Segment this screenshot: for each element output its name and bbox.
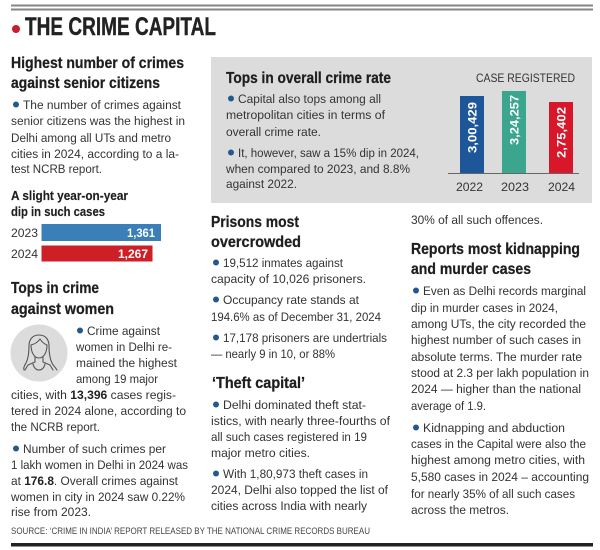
text block: murder: among UTs, the city recorded the (411, 317, 586, 331)
panel: kidnapping and murder (411, 241, 589, 517)
heading: prisons: Prisons most (211, 214, 299, 231)
text block: kidnapping (411, 421, 589, 517)
text block: prisons (211, 256, 387, 361)
text block: crime against women: mained the highest (76, 356, 178, 370)
heading: crime against women: Tops in crime (11, 280, 99, 297)
text block: rate per lakh women: at 176.8. Overall crimes against (11, 474, 179, 488)
bar chart: case registered (448, 71, 579, 194)
bar chart: senior citizen crimes: 1,361 (127, 226, 155, 240)
text block: senior citizens: senior citizens was the highest in (11, 114, 185, 128)
heading: senior citizens: against senior citizens (11, 75, 160, 92)
text block: theft capital: istics, with nearly three-fourths of (211, 414, 391, 428)
text block: kidnapping: 5,580 cases in 2024 – accounting (411, 470, 589, 484)
text block: senior citizens: The number of crimes against (23, 98, 182, 112)
text block: kidnapping: highest among metro cities, with (411, 453, 585, 467)
panel: senior citizens (11, 55, 185, 262)
bar chart: case registered: 2,75,402 (554, 107, 568, 158)
heading: crime against women: against women (11, 301, 114, 318)
text block: overall crime rate: Capital also tops among all (238, 92, 381, 106)
heading: theft capital: ‘Theft capital’ (212, 375, 305, 392)
subheading: year-on-year dip: A slight year-on-year (11, 189, 128, 203)
text block: theft capital: cities across India with nearly (211, 499, 368, 513)
text block: overall crime rate (225, 92, 419, 191)
text block: theft capital: 30% of all such offences. (411, 213, 543, 227)
title: THE CRIME CAPITAL (25, 13, 216, 41)
text block: prisons: Occupancy rate stands at (223, 293, 360, 307)
text block: senior citizens (11, 98, 185, 176)
text block: murder (411, 284, 589, 413)
text block: theft capital: Delhi dominated theft stat- (223, 398, 366, 412)
bar chart: case registered: 3,24,257 (508, 95, 522, 145)
text block: kidnapping: across the metros. (411, 503, 509, 517)
text block: murder: highest number of such cases in (411, 333, 581, 347)
text block: kidnapping: Kidnapping and abduction (423, 421, 565, 435)
text block: crime against women: the NCRB report. (11, 420, 100, 434)
bar chart: senior citizen crimes (11, 224, 161, 262)
text block: crime against women: women in Delhi re- (75, 340, 172, 354)
bar chart: case registered: CASE REGISTERED (476, 71, 575, 85)
text block: crime against women (11, 324, 186, 434)
heading: kidnapping and murder: and murder cases (411, 261, 531, 278)
text block: murder: 2024 — higher than the national (411, 382, 581, 396)
text block: crime against women: among 19 major (76, 372, 158, 386)
heading: kidnapping and murder: Reports most kidnapping (411, 241, 580, 258)
text block: overall crime rate: against 2022. (226, 177, 297, 191)
text block: senior citizens: Delhi among all UTs and metro (11, 131, 171, 145)
text block: crime against women: Crime against (87, 324, 161, 338)
text block: prisons: 19,512 inmates against (223, 256, 344, 270)
source note: SOURCE: ‘CRIME IN INDIA’ REPORT RELEASED BY THE NATIONAL CRIME RECORDS BUREAU (11, 526, 370, 537)
panel: overall crime rate (211, 57, 592, 203)
text block: crime against women: cities, with 13,396 cases regis- (11, 388, 176, 402)
text block: overall crime rate: It, however, saw a 15% dip in 2024, (238, 146, 419, 160)
panel: theft capital (211, 213, 543, 513)
heading: kidnapping and murder (411, 241, 580, 278)
text block: theft capital: With 1,80,973 theft cases in (223, 467, 368, 481)
text block: overall crime rate: overall crime rate. (226, 125, 321, 139)
subheading: year-on-year dip (11, 189, 128, 219)
text block: rate per lakh women: rise from 2023. (11, 505, 91, 519)
text block: murder: Even as Delhi records marginal (423, 284, 586, 298)
bar chart: senior citizen crimes: 2024 (11, 247, 38, 261)
subheading: year-on-year dip: dip in such cases (11, 205, 105, 219)
heading: prisons: overcrowded (211, 234, 301, 251)
text block: rate per lakh women: women in city in 2024 saw 0.22% (10, 490, 185, 504)
text block: kidnapping: cases in the Capital were also the (411, 437, 586, 451)
bar chart: case registered: 2024 (548, 180, 575, 194)
text block: murder: absolute terms. The murder rate (411, 350, 582, 364)
text block: senior citizens: cities in 2024, according to a la- (11, 147, 179, 161)
text block: theft capital (211, 213, 543, 513)
panel: prisons (211, 214, 387, 361)
bar chart: case registered: 2023 (501, 180, 529, 194)
text block: rate per lakh women (10, 442, 188, 519)
text block: kidnapping: for nearly 35% of all such cases (411, 487, 575, 501)
icon: woman portrait (10, 324, 68, 382)
text block: overall crime rate: when compared to 2023, and 8.8% (225, 162, 410, 176)
bar chart: senior citizen crimes: 1,267 (118, 247, 148, 261)
text block: theft capital: all such cases registered in 19 (211, 430, 367, 444)
text block: rate per lakh women: 1 lakh women in Delhi in 2024 was (11, 458, 188, 472)
heading: crime against women (11, 280, 114, 318)
text block: crime against women: tered in 2024 alone, according to (11, 404, 186, 418)
text block: theft capital: 2024, Delhi also topped the list of (211, 483, 389, 497)
text block: murder: dip in murder cases in 2024, (411, 301, 558, 315)
bar chart: case registered: 2022 (456, 180, 483, 194)
text block: murder: average of 1.9. (411, 399, 486, 413)
heading: overall crime rate: Tops in overall crime rate (226, 70, 391, 87)
text block: prisons: 17,178 prisoners are undertrials (223, 331, 387, 345)
panel: crime against women (10, 280, 188, 519)
bar chart: case registered: 3,00,429 (466, 102, 480, 153)
text block: theft capital: major metro cities. (211, 446, 310, 460)
text block: prisons: capacity of 10,026 prisoners. (211, 272, 366, 286)
text block: overall crime rate: metropolitan cities in terms of (226, 108, 386, 122)
heading: prisons (211, 214, 301, 251)
bar chart: senior citizen crimes: 2023 (11, 226, 38, 240)
text block: rate per lakh women: Number of such crimes per (23, 442, 166, 456)
text block: murder: stood at 2.3 per lakh population in (411, 366, 589, 380)
heading: senior citizens: Highest number of crimes (11, 55, 184, 72)
heading: senior citizens (11, 55, 184, 92)
text block: prisons: — nearly 9 in 10, or 88% (211, 347, 335, 361)
text block: senior citizens: test NCRB report. (11, 162, 102, 176)
text block: prisons: 194.6% as of December 31, 2024 (211, 310, 381, 324)
